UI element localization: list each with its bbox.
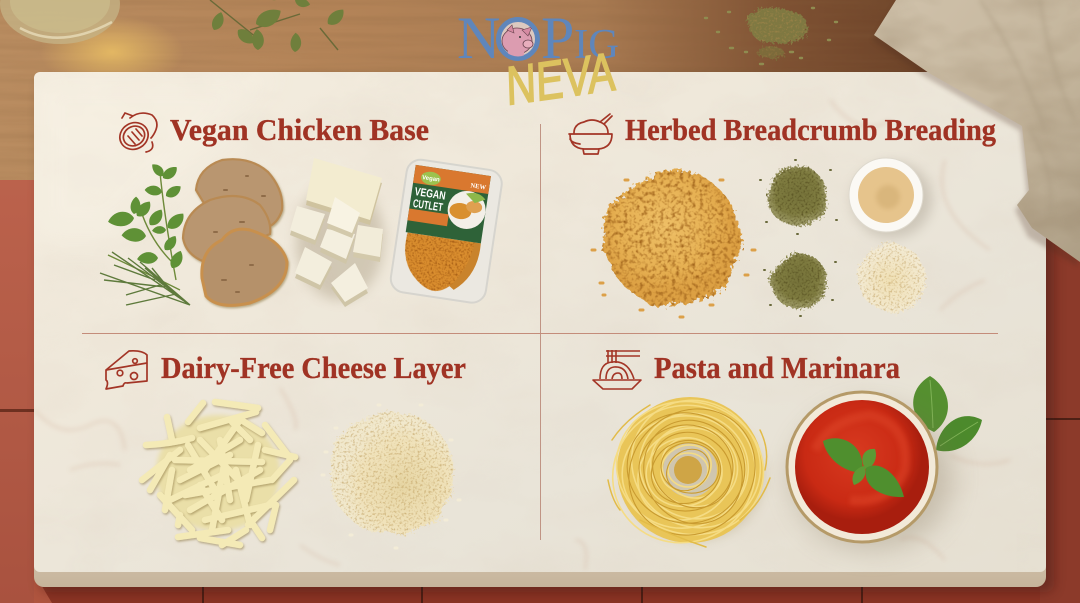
logo: No Pig Neva: P xyxy=(541,5,574,71)
seitan slices xyxy=(183,159,287,305)
towel xyxy=(870,0,1080,267)
panel: pasta and marinara xyxy=(590,350,982,566)
glass of oil xyxy=(0,0,120,44)
panel: herbed breadcrumb breading xyxy=(569,112,996,317)
logo: No Pig Neva xyxy=(458,17,618,106)
icon: bowl of crumbs xyxy=(569,114,612,154)
tofu block and cubes xyxy=(290,158,384,307)
marinara bowl xyxy=(787,392,952,550)
herbs: oregano and rosemary xyxy=(100,161,190,305)
dividers xyxy=(82,124,998,540)
oregano sprig on the table xyxy=(208,0,348,53)
icon: cheese wedge xyxy=(106,351,147,389)
basil garnish xyxy=(823,438,904,497)
breadcrumb pile xyxy=(592,170,755,317)
icon: cutlet xyxy=(115,113,157,155)
grated parmesan xyxy=(322,405,460,548)
icon: pasta bowl xyxy=(593,350,641,389)
logo: No Pig Neva: NEVA xyxy=(505,42,616,117)
heading: Dairy-Free Cheese Layer xyxy=(161,350,466,385)
grated powder pile xyxy=(858,244,926,312)
panel: dairy-free cheese layer xyxy=(106,350,466,548)
background: wood table xyxy=(0,0,1080,240)
product package: vegan cutlet: NEW xyxy=(470,182,487,192)
heading: Pasta and Marinara xyxy=(654,350,900,385)
background: terracotta tiles xyxy=(0,180,1080,603)
panel: vegan chicken base xyxy=(100,112,504,307)
spaghetti nest xyxy=(590,374,786,566)
heading: Vegan Chicken Base xyxy=(170,112,429,147)
board shadow xyxy=(40,80,1054,592)
small bowl of seasoning xyxy=(849,158,932,238)
product package: vegan cutlet: CUTLET xyxy=(412,198,444,214)
dried herb piles xyxy=(760,160,837,316)
logo: No Pig Neva: N xyxy=(457,5,500,71)
shredded cheese xyxy=(142,402,295,545)
logo: No Pig Neva: IG xyxy=(574,22,619,68)
product package: vegan cutlet xyxy=(389,158,504,305)
basil beside bowl xyxy=(913,376,982,451)
heading: Herbed Breadcrumb Breading xyxy=(625,112,996,147)
logo pig in the letter O xyxy=(498,20,538,58)
product package: vegan cutlet: VEGAN xyxy=(414,186,446,203)
scattered dried herbs on the table xyxy=(705,8,837,64)
product package: vegan cutlet: Vegan xyxy=(422,175,440,184)
